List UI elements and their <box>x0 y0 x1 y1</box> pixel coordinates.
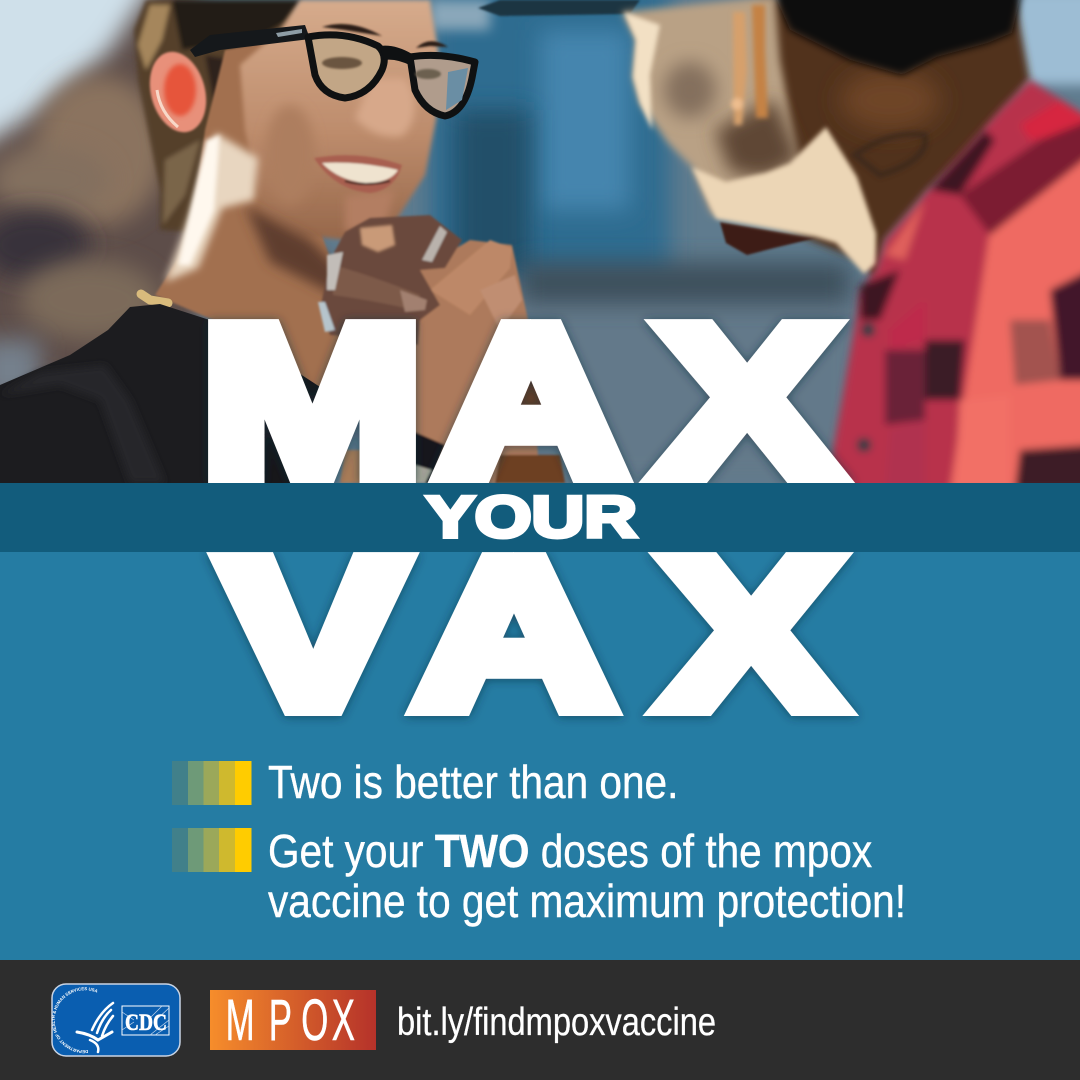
text: get your two doses: Get your TWO doses of the mpox <box>268 827 872 878</box>
left person: ear <box>148 50 208 134</box>
right person: hat brim <box>478 0 640 16</box>
headline: MAX <box>206 313 858 483</box>
bullet icon: first gradient stripes <box>172 761 252 805</box>
headline: VAX: X <box>661 516 841 752</box>
left person: neck <box>154 44 339 386</box>
right person: chin beard <box>720 222 816 255</box>
right person: hair <box>772 0 1022 75</box>
headline: VAX: A <box>414 516 614 752</box>
headline: MAX: M <box>202 282 422 519</box>
left person: face <box>240 0 438 240</box>
logo: eagle <box>77 1003 113 1052</box>
left person: sunlit cheek and neck <box>165 133 258 282</box>
left person: necklace <box>141 294 168 303</box>
left person: glasses <box>190 25 475 116</box>
logo: CDC box: CDC <box>125 1010 167 1035</box>
headline: MAX: X <box>657 283 837 519</box>
left person: eyebrows <box>322 24 448 48</box>
text: get your two doses: vaccine to get maximum protection! <box>268 877 906 928</box>
text: get your two doses <box>268 827 906 928</box>
right person: face <box>622 0 800 215</box>
text: two is better than one: Two is better than one. <box>268 758 678 809</box>
logo: HHS and CDC <box>51 983 181 1057</box>
clasped hands <box>318 215 565 483</box>
right person: neck and beardline <box>760 0 1036 278</box>
footer bar <box>0 960 1080 1080</box>
left person: nose <box>355 78 414 137</box>
left person: face shading <box>245 105 395 295</box>
right person: neck tattoo <box>855 134 925 175</box>
left person: hair <box>134 0 302 232</box>
right person: warm neck highlight <box>840 70 940 130</box>
headline: MAX: A <box>437 283 625 519</box>
photo: two friends clasping hands <box>0 0 1080 520</box>
logo: seal text: DEPARTMENT OF HEALTH & HUMAN SERVICES USA <box>52 987 98 1054</box>
right person: sunlit temple <box>624 12 660 130</box>
headline: VAX <box>204 552 860 723</box>
photo background: blurred street <box>0 0 1080 520</box>
right person: sunlit jaw <box>692 127 876 274</box>
band: dark teal stripe <box>0 483 1080 552</box>
right person: plaid shirt <box>826 80 1080 490</box>
right person: earring <box>731 5 768 125</box>
headline: VAX: V <box>221 516 405 753</box>
left person: smile <box>314 155 402 193</box>
url text: bit.ly/findmpoxvaccine <box>397 1001 716 1044</box>
mpox badge: MPOX <box>226 989 355 1053</box>
left person: black sweater <box>0 304 340 483</box>
headline: YOUR: YOUR <box>426 485 637 550</box>
bullet icon: second gradient stripes <box>172 828 252 872</box>
